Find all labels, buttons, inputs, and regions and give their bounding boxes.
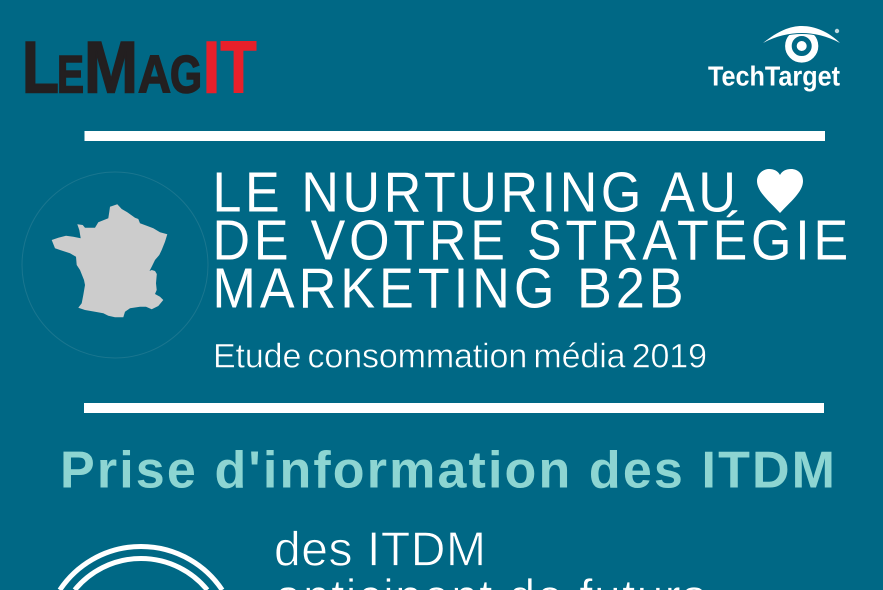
stat ring [60,546,222,590]
bottom divider [84,403,824,413]
wordmark: TechTarget [708,60,840,92]
logo: LeMagIT: I [203,28,220,108]
section heading: Prise d'information des ITDM [60,442,835,500]
circle with map of France [22,172,208,358]
title: MARKETING B2B [212,257,684,320]
icon: map of France [52,204,167,317]
logo: LeMagIT: E [57,46,84,104]
logo: LeMagIT: T [220,28,256,108]
title [212,161,848,320]
logo: TechTarget [708,26,840,92]
stat text: des ITDM [274,524,486,577]
logo: LeMagIT: M [84,28,138,108]
logo: LeMagIT: A [138,46,171,104]
stat text [274,524,706,590]
title: LE NURTURING AU [212,161,736,224]
icon: heart [757,169,803,213]
logo: LeMagIT: G [170,46,202,104]
icon: TechTarget eye [763,26,840,59]
title: DE VOTRE STRATÉGIE [212,209,848,272]
subtitle: Etude consommation média 2019 [213,338,707,376]
logo: LeMagIT: L [22,28,59,108]
logo: LeMagIT [22,28,256,108]
top divider [84,131,825,141]
